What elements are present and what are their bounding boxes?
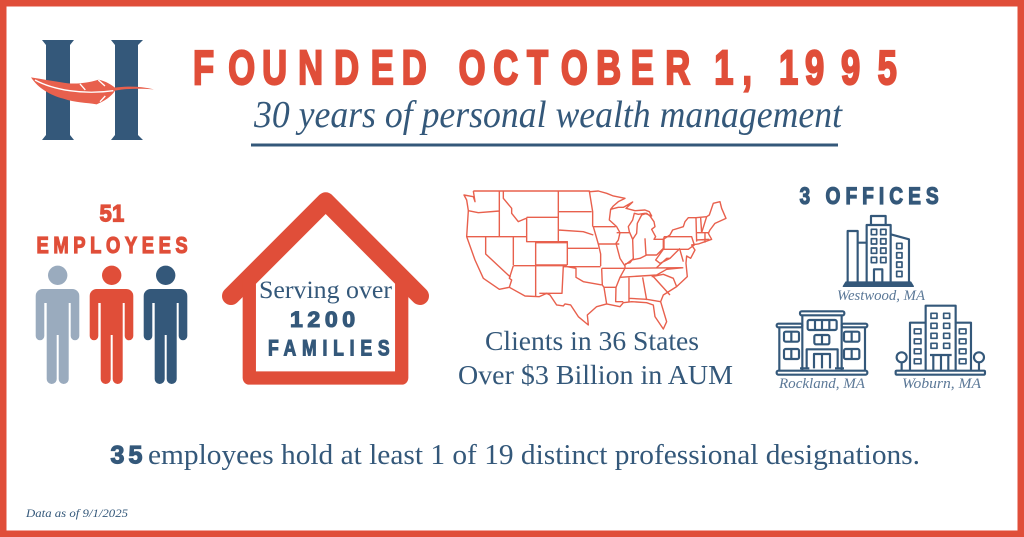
icon: Rockland building bbox=[777, 311, 867, 375]
title: FOUNDED OCTOBER 1, 1995 bbox=[193, 40, 897, 94]
icon: house bbox=[231, 201, 420, 378]
subtitle underline bbox=[251, 144, 838, 146]
icon: person red bbox=[90, 266, 133, 384]
map: United States bbox=[464, 191, 726, 329]
icon: person grey bbox=[36, 266, 79, 384]
footnote: Data as of 9/1/2025 bbox=[25, 508, 128, 520]
icon: Woburn building bbox=[896, 306, 985, 375]
employees panel bbox=[36, 200, 188, 384]
label: Rockland: Rockland, MA bbox=[778, 376, 865, 392]
icon: Westwood building bbox=[843, 216, 913, 286]
logo: H with feather bbox=[31, 40, 154, 140]
offices heading: 3 OFFICES bbox=[800, 182, 939, 210]
label: Woburn: Woburn, MA bbox=[902, 376, 981, 392]
designations text: employees hold at least 1 of 19 distinct professional designations. bbox=[148, 439, 920, 471]
label: Westwood: Westwood, MA bbox=[837, 288, 925, 304]
map text: AUM: Over $3 Billion in AUM bbox=[458, 360, 733, 390]
employees label: EMPLOYEES bbox=[36, 233, 188, 259]
designations statement bbox=[110, 439, 920, 471]
house panel bbox=[231, 201, 420, 378]
map text: clients in states: Clients in 36 States bbox=[485, 326, 699, 356]
employees count: 51 bbox=[100, 200, 125, 227]
house text: 1200: 1200 bbox=[290, 307, 355, 332]
house text: serving over: Serving over bbox=[259, 277, 393, 304]
designations count: 35 bbox=[110, 441, 142, 469]
house text: families: FAMILIES bbox=[268, 337, 390, 361]
icon: person navy bbox=[144, 266, 187, 384]
subtitle: 30 years of personal wealth management bbox=[253, 94, 843, 136]
